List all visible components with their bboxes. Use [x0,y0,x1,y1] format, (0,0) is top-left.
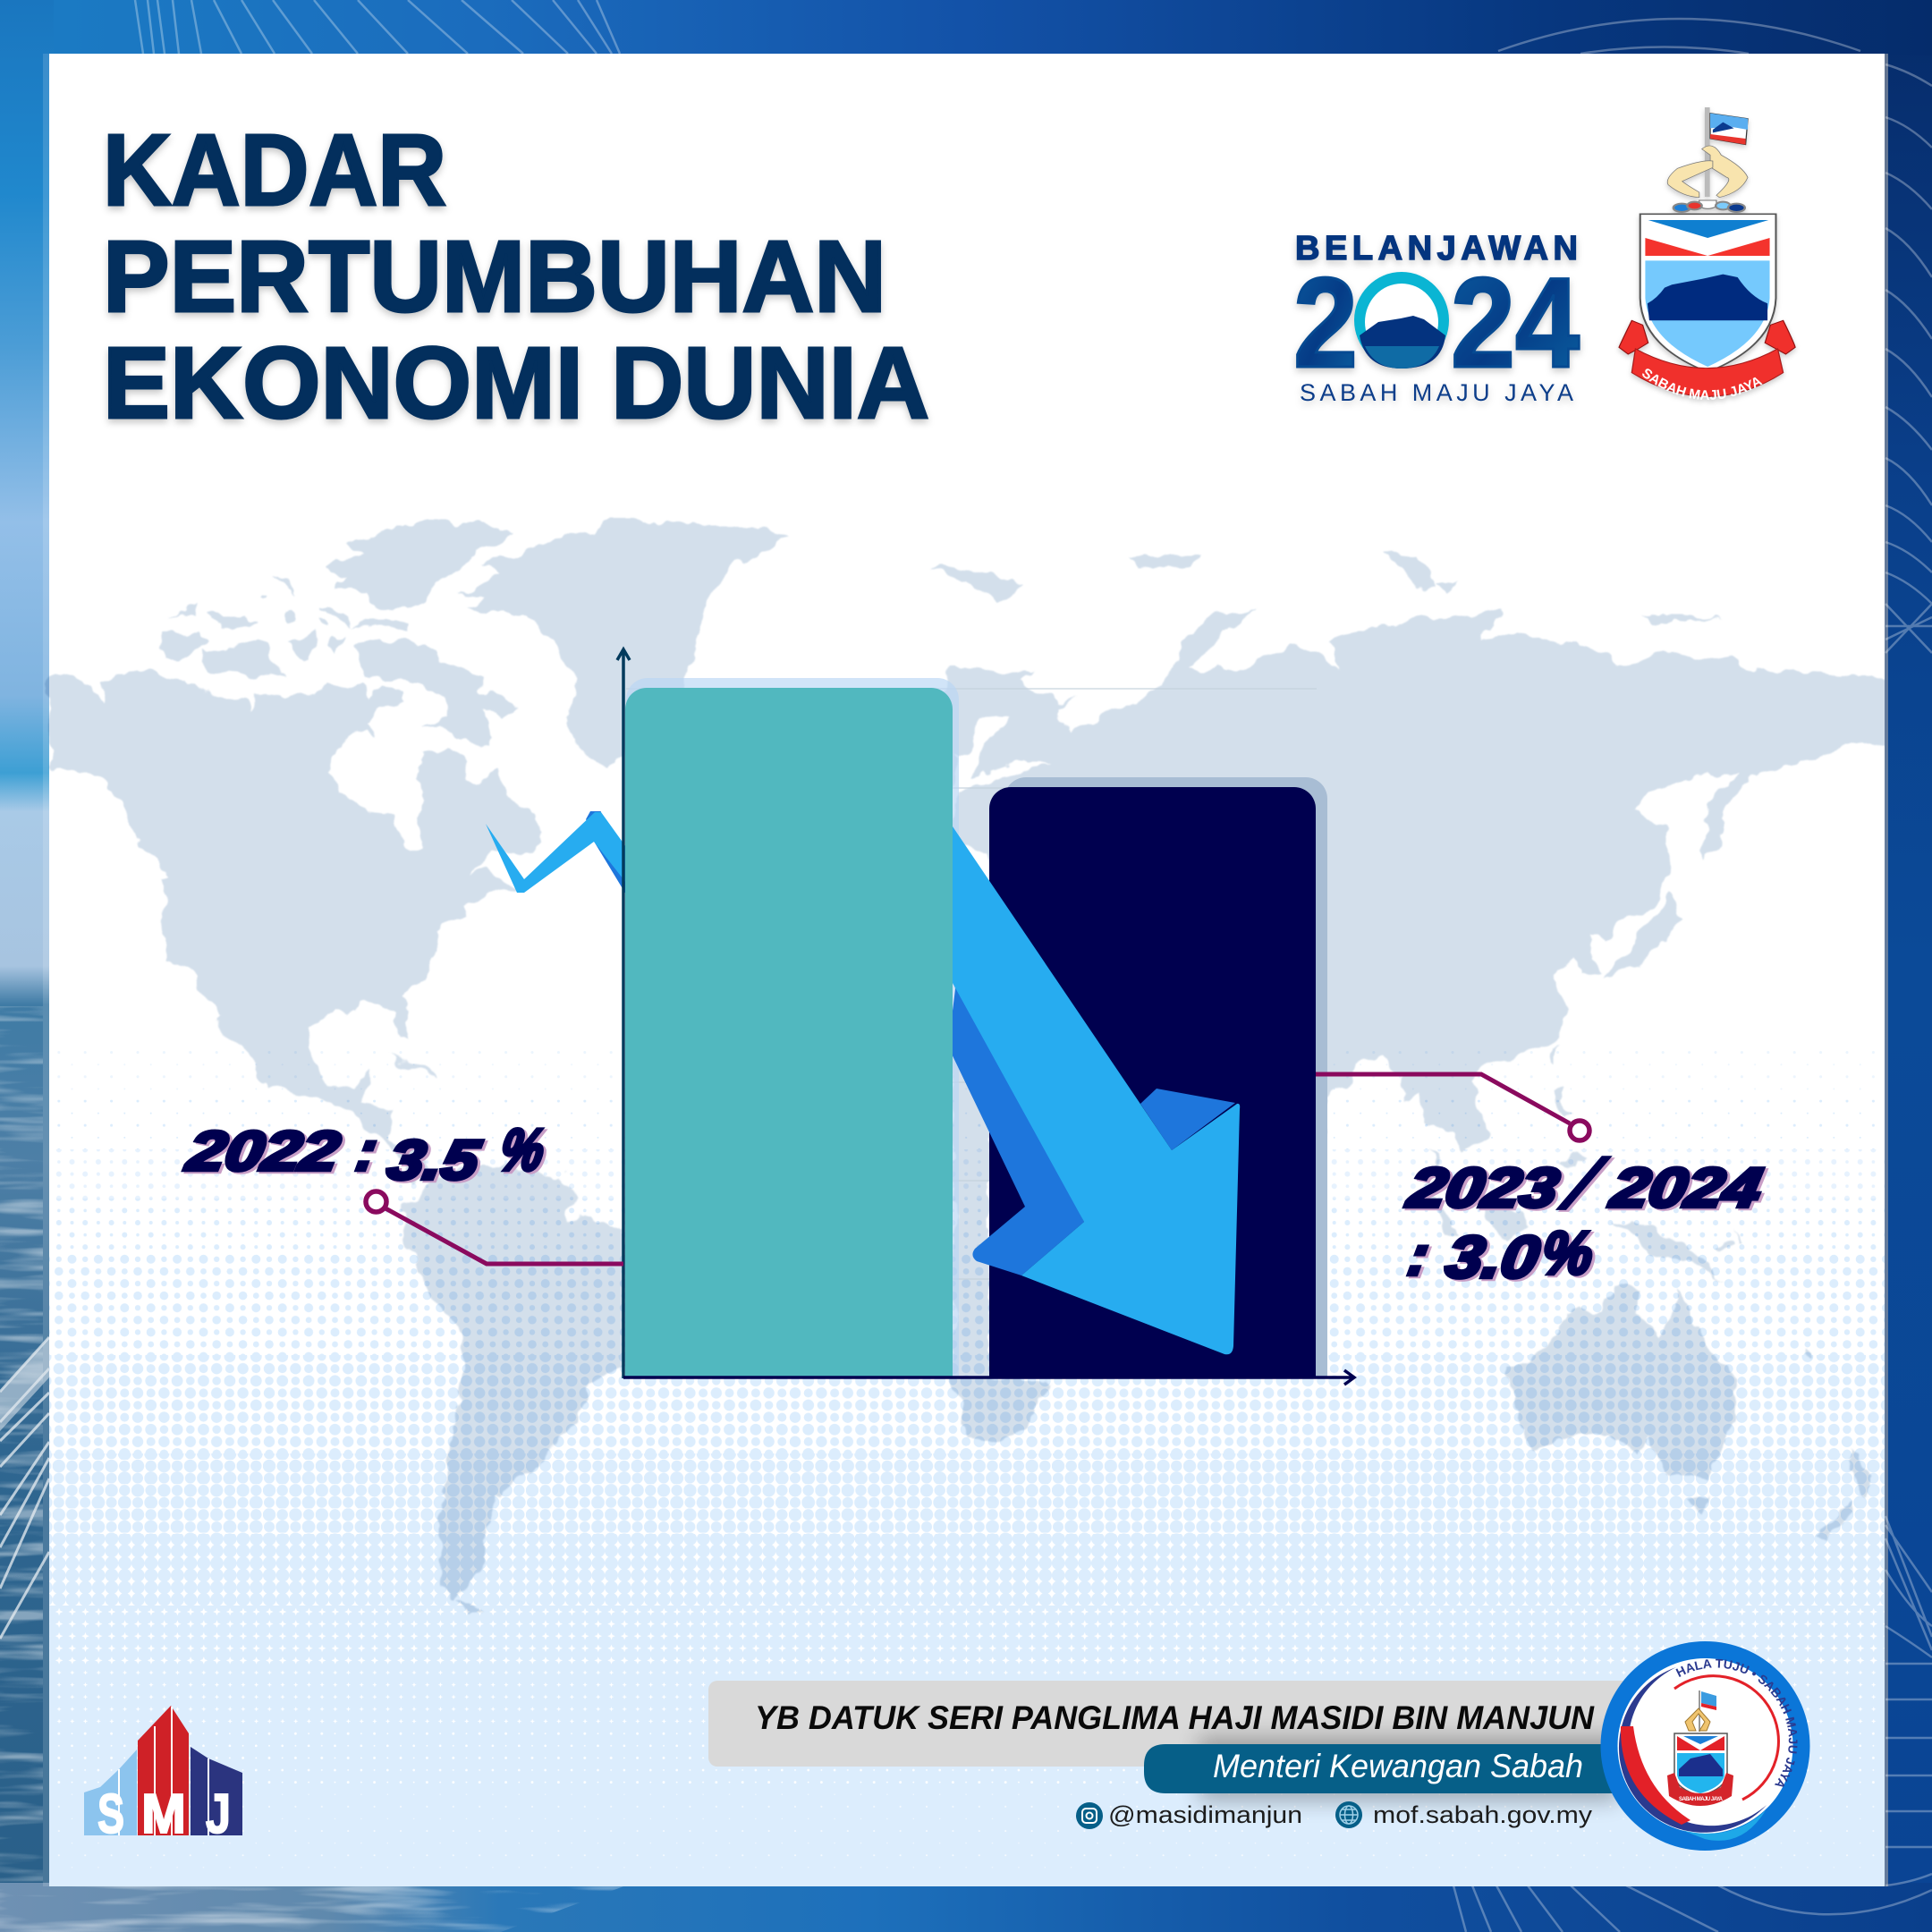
arrow: falling trend [486,812,1240,1354]
logo: SMJ: J [206,1784,231,1845]
callout line: 2022 [366,1191,623,1264]
bar halo: 2022 [626,678,959,1377]
label: 2022 value: % [495,1117,549,1183]
label: 2023/2024 value: 3.0 [1441,1224,1544,1291]
bar: 2022 [625,688,953,1377]
logo: Belanjawan 2024: 24 [1451,252,1580,394]
logo: Belanjawan 2024: SABAH MAJU JAYA [1300,379,1573,406]
label: 2023/2024 value: % [1538,1219,1596,1287]
label: 2022 value: 3.5 [384,1129,485,1191]
footer: instagram handle: @masidimanjun [1108,1801,1302,1828]
label: 2022 value: 2022 [182,1120,344,1182]
label: 2023/2024 value: / [1550,1146,1616,1223]
footer: website: mof.sabah.gov.my [1373,1801,1593,1828]
logo: Sabah coat of arms: SABAH MAJU JAYA [1642,369,1762,404]
title: KADAR [103,114,446,226]
label: 2023/2024 value [1402,1146,1767,1291]
logo: Belanjawan 2024 [1293,230,1580,406]
y axis [617,649,630,1378]
callout line: 2023/2024 [1316,1074,1589,1140]
map: South-East Asia and Oceania [1422,1045,1812,1515]
map: North America and Greenland [49,519,789,1085]
label: 2023/2024 value: 2024 [1606,1157,1767,1219]
title: PERTUMBUHAN [103,220,886,333]
arrow: falling trend, shadow [586,811,1235,1275]
badge crest: SABAH MAJU JAYA [1679,1797,1724,1802]
title: EKONOMI DUNIA [103,326,929,439]
logo: Belanjawan 2024: 2 [1293,252,1358,394]
label: 2022 value [182,1117,549,1191]
footer: minister title pill [1144,1737,1637,1801]
logo: SMJ: M [141,1784,186,1845]
x axis [623,1370,1354,1385]
title [103,114,929,439]
label: 2022 value: : [352,1120,381,1182]
chart: bar comparison with falling arrow [486,649,1354,1385]
halftone dot field [49,1051,1885,1886]
badge crest [1667,1690,1733,1806]
logo: SMJ [84,1706,242,1845]
label: 2023/2024 value: 2023 [1402,1157,1563,1219]
footer: minister name bar: YB DATUK SERI PANGLIMA HAJI MASIDI BIN MANJUN [755,1699,1595,1736]
logo: Sabah coat of arms [1617,107,1798,404]
bar halo: 2023/2024 [1004,777,1327,1377]
map: New Zealand [1814,1453,1875,1541]
map: European coast cut-outs [953,671,1085,818]
badge: Hala Tuju Sabah Maju Jaya: HALA TUJU • SABAH MAJU JAYA [1676,1658,1798,1787]
chart gridlines [626,689,1317,1279]
label: 2023/2024 value: : [1404,1224,1433,1287]
map: Eurasia and Africa [930,552,1892,1448]
bar: 2023/2024 [989,787,1316,1377]
footer: minister name bar [708,1681,1657,1767]
world map [49,519,1892,1614]
logo: SMJ: S [97,1784,124,1845]
logo: Belanjawan 2024: BELANJAWAN [1295,230,1578,267]
map: Central and South America [215,1017,639,1614]
badge: Hala Tuju Sabah Maju Jaya [1601,1641,1810,1851]
footer: minister title pill: Menteri Kewangan Sabah [1213,1748,1583,1784]
